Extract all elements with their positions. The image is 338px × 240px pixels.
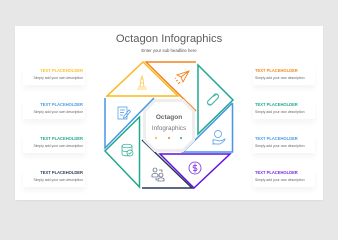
card: left 4: Simply add your own description [34,178,83,182]
segment: yellow [107,62,178,96]
card: right 4: TEXT PLACEHOLDER [255,170,298,175]
center title: Octagon [156,114,182,121]
center subtitle: Infographics [152,125,186,132]
card: right 1: Simply add your own description [255,76,304,80]
card: left 2: Simply add your own description [34,110,83,114]
card: right 4 [253,168,315,187]
segment: purple [160,154,230,188]
card: right 2 [253,100,315,119]
card: right 4: Simply add your own description [255,178,304,182]
card: left 2: TEXT PLACEHOLDER [40,102,83,107]
card: left 3: Simply add your own description [34,144,83,148]
card: left 1: TEXT PLACEHOLDER [40,68,83,73]
card: left 4 [23,168,85,187]
background panel [15,26,323,200]
card: right 2: TEXT PLACEHOLDER [255,102,298,107]
card: left 1: Simply add your own description [34,76,83,80]
segment: green [105,117,140,187]
icon: database check [122,144,133,156]
icon: lighthouse [137,76,147,89]
subtitle: Enter your sub headline here [141,48,197,52]
icon: dollar coin [189,162,201,174]
card: right 2: Simply add your own description [255,110,304,114]
icon: document pen [118,107,130,119]
card: right 3 [253,134,315,153]
card: right 1 [253,66,315,85]
card: right 3: Simply add your own description [255,144,304,148]
icon: hand with coin [213,130,225,145]
segment: teal [198,65,233,134]
dot: yellow [155,137,157,139]
card: left 4: TEXT PLACEHOLDER [40,170,83,175]
card: right 1: TEXT PLACEHOLDER [255,68,298,73]
icon: paperclip link [208,94,218,105]
card: right 3: TEXT PLACEHOLDER [255,136,298,141]
segment: navy [142,140,192,188]
card: left 3: TEXT PLACEHOLDER [40,136,83,141]
card: left 3 [23,134,85,153]
segment: orange [146,62,196,111]
title: Octagon Infographics [116,33,222,45]
card: left 2 [23,100,85,119]
dot: orange [168,137,170,139]
dot: teal [180,137,182,139]
icon: paper plane [175,71,189,84]
card: left 1 [23,66,85,85]
icon: people swap [152,168,164,181]
center octagon [144,100,194,150]
segment: blue right [183,103,232,152]
segment: blue left [105,98,154,148]
